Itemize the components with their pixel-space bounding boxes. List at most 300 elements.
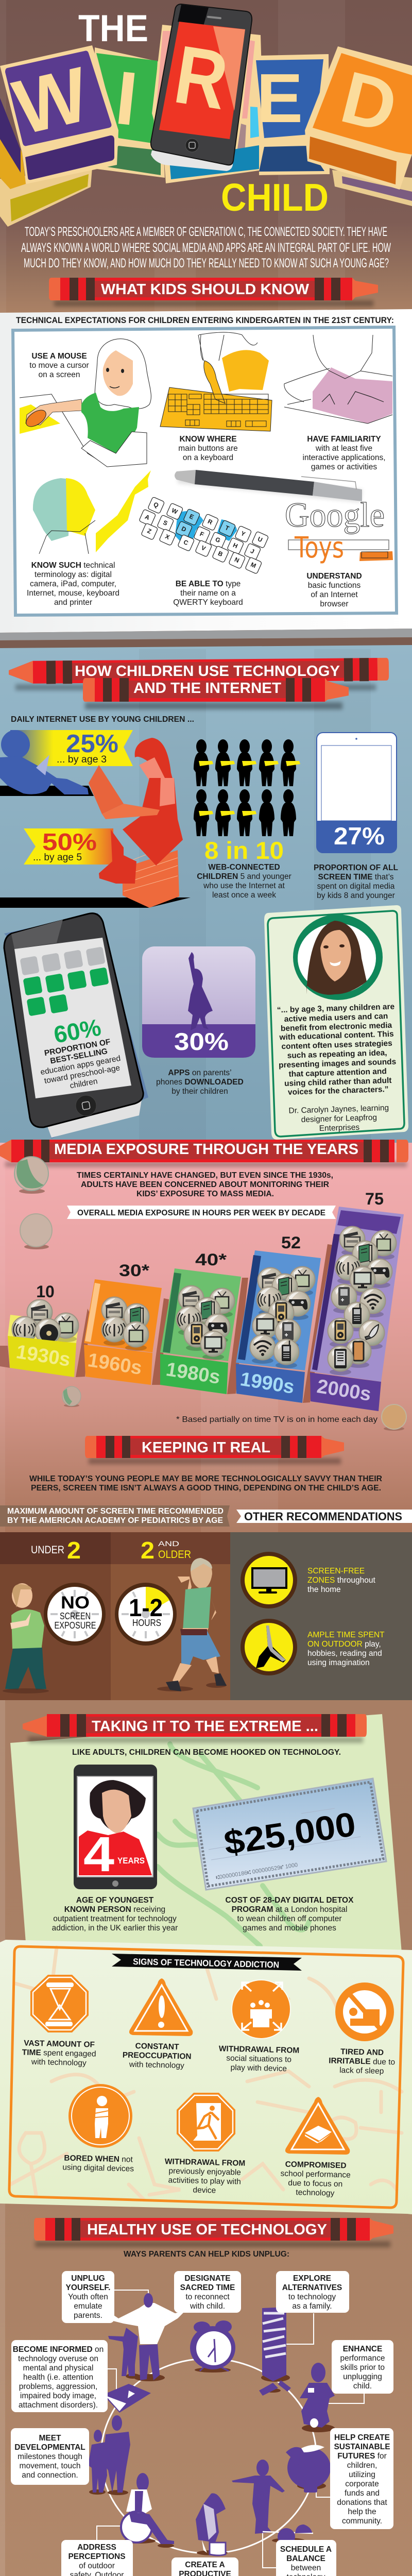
illustration: qwerty keys: X <box>164 533 171 541</box>
tip box: explore alternatives: ALTERNATIVES <box>282 2283 342 2292</box>
icon: screen-free <box>241 1552 297 1608</box>
phone: 60 percent: BEST-SELLING <box>49 1047 108 1065</box>
background: planks <box>139 649 371 1144</box>
crayon heading: how children use technology <box>9 658 389 690</box>
label: cost of detox: COST OF 28-DAY DIGITAL DETOX <box>226 1896 354 1905</box>
sign: bored person <box>68 2084 132 2148</box>
intro paragraph <box>21 225 391 270</box>
figure: adult and child reaching <box>108 2293 185 2381</box>
clock: no screen exposure: SCREEN <box>60 1611 91 1621</box>
sign label: withdrawal activities: device <box>193 2185 216 2195</box>
sign label: constant preoccupation: PREOCCUPATION <box>123 2050 192 2061</box>
sign label: bored when: using digital devices <box>62 2163 134 2174</box>
label: apps on parents phones: phones DOWNLOADED <box>156 1078 244 1087</box>
bar: 1960s 30 hours: 30* <box>119 1261 150 1280</box>
crayon heading: what kids should know <box>49 278 378 307</box>
label: know such: camera, iPad, computer, <box>30 580 116 588</box>
quote text: Enterprises <box>319 1123 360 1133</box>
background: lower wood section <box>0 1700 412 2576</box>
cycle diagram: ways to unplug <box>11 2271 393 2576</box>
pictogram: 8 in 10 children <box>194 739 300 836</box>
tip box: schedule a balance: between <box>291 2564 321 2572</box>
figure: adult and child standing <box>88 2415 130 2495</box>
panel: under 2 <box>0 1532 111 1700</box>
tip box: enhance <box>332 2340 393 2394</box>
label: know where: main buttons are <box>178 444 238 453</box>
bar: 1990s 52 hours <box>227 1233 321 1403</box>
quote text: active media users and can <box>284 1012 388 1024</box>
bar: 2000s 75 hours: 2000s <box>316 1376 372 1405</box>
tip box: meet developmental: DEVELOPMENTAL <box>14 2443 85 2452</box>
crayon heading: media exposure: MEDIA EXPOSURE THROUGH THE YEARS <box>54 1141 358 1158</box>
tip box: meet developmental: and connection. <box>22 2471 78 2480</box>
label: use a mouse: USE A MOUSE <box>31 352 87 361</box>
label: web-connected children: who use the Internet at <box>203 882 285 890</box>
tip box: become informed <box>11 2340 108 2412</box>
clock: no screen exposure: EXPOSURE <box>55 1620 96 1631</box>
tip box: meet developmental: MEET <box>39 2434 61 2443</box>
illustration: qwerty keys: V <box>200 544 207 552</box>
ring <box>101 2359 316 2553</box>
label: web-connected children: CHILDREN 5 and younger <box>197 872 291 881</box>
tip box: explore alternatives: to technology <box>288 2293 336 2301</box>
ribbon: 50 percent by age 5 <box>24 828 113 865</box>
tip box: designate sacred time: with child. <box>190 2302 225 2311</box>
block: W purple <box>0 45 118 184</box>
tip box: sustainable futures: HELP CREATE <box>334 2433 390 2442</box>
tip box: enhance: skills prior to <box>340 2363 385 2372</box>
illustration: qwerty keys: N <box>233 556 241 564</box>
tip box: become informed: health (i.e. attention <box>23 2373 93 2382</box>
quote text: benefit from electronic media <box>281 1021 392 1033</box>
ribbon: 50 percent by age 5: 50% <box>42 828 97 855</box>
sign label: compromised: due to focus on <box>288 2179 342 2189</box>
sign label: withdrawal social <box>218 2044 299 2074</box>
quote text: using child rather than adult <box>284 1076 392 1088</box>
tip box: address perceptions <box>61 2540 133 2576</box>
phone: 60 percent: children <box>69 1077 98 1090</box>
app tile: 30 percent: 30% <box>174 1028 229 1055</box>
figure: toddler <box>3 1583 49 1693</box>
background: hero wood <box>0 0 412 317</box>
marble: large grey <box>20 1214 52 1249</box>
heading: 2 and older: 2 <box>141 1537 154 1564</box>
label: proportion of screen time: spent on digital media <box>317 882 395 891</box>
sign label: vast amount: TIME spent engaged <box>22 2048 96 2059</box>
tip box: become informed: BECOME INFORMED on <box>13 2345 104 2354</box>
phone: 60 percent: toward preschool-age <box>44 1063 121 1086</box>
illustration: google toys browser: Toys <box>294 531 344 565</box>
crayon heading: taking it to the extreme <box>23 1714 367 1743</box>
tip box: address perceptions: PERCEPTIONS <box>68 2552 126 2561</box>
intro text: media <box>77 1171 333 1198</box>
sign: school book triangle <box>285 2097 350 2155</box>
sign: withdrawal circle <box>231 1979 291 2039</box>
label: screen-free zones: SCREEN-FREE <box>307 1567 365 1575</box>
icon: tablet 27 percent <box>317 733 397 853</box>
label: proportion of screen time: SCREEN TIME that’s <box>318 873 394 882</box>
illustration: google toys browser <box>285 495 393 565</box>
label: ample time outdoors: ON OUTDOOR play, <box>307 1640 381 1649</box>
label: have familiarity: with at least five <box>315 444 372 453</box>
hero: smartphone with R <box>151 4 252 171</box>
tip box: meet developmental: milestones though <box>18 2452 82 2461</box>
figure: baby <box>300 2363 335 2432</box>
label: know where: on a keyboard <box>183 453 233 462</box>
ribbon: max screen time <box>0 1505 230 1527</box>
label: have familiarity: interactive applications, <box>302 453 386 462</box>
label: use a mouse: on a screen <box>38 370 80 379</box>
bar: 1960s 30 hours <box>76 1261 162 1385</box>
quote text: such as repeating an idea, <box>287 1048 387 1060</box>
label: apps on parents phones: APPS on parents’ <box>168 1069 232 1077</box>
sign label: vast amount: VAST AMOUNT OF <box>24 2039 95 2049</box>
label: web-connected children: WEB-CONNECTED <box>208 863 280 872</box>
sign label: withdrawal activities: activities to play with <box>168 2176 241 2187</box>
label: proportion of screen time: by kids 8 and younger <box>317 891 395 900</box>
bar: 1980s 40 hours <box>152 1250 241 1394</box>
illustration: qwerty keys: S <box>162 519 169 527</box>
label: apps on parents phones: by their children <box>171 1087 228 1096</box>
quote text: presenting images and sounds <box>279 1058 397 1070</box>
tip box: designate sacred time: SACRED TIME <box>180 2283 235 2292</box>
hero: smartphone with R: R <box>169 28 234 127</box>
label: proportion of screen time: PROPORTION OF ALL <box>314 863 398 872</box>
paper: signs of technology addiction <box>0 1940 412 2214</box>
sign label: withdrawal activities: previously enjoyable <box>168 2166 241 2177</box>
crayon heading: and the internet <box>83 678 349 709</box>
crayon heading: media exposure <box>0 1140 408 1167</box>
shelf: top black <box>0 786 94 796</box>
intro text: media: TIMES CERTAINLY HAVE CHANGED, BUT EVEN SINCE THE 1930s, <box>77 1171 333 1180</box>
tip box: designate sacred time: DESIGNATE <box>184 2274 231 2283</box>
quote text: that capture attention and <box>288 1067 387 1079</box>
figure: balance scale <box>263 2524 313 2546</box>
sign label: tired and irritable: TIRED AND <box>340 2047 384 2057</box>
ribbon: signs of technology addiction: SIGNS OF TECHNOLOGY ADDICTION <box>133 1957 279 1970</box>
ribbon: 25 percent by age 3: ... by age 3 <box>57 754 107 765</box>
crayon heading: healthy use of technology: HEALTHY USE OF TECHNOLOGY <box>87 2222 327 2238</box>
block: back yellow <box>0 98 92 227</box>
illustration: girl with mouse <box>20 339 151 467</box>
tip box: productive role <box>171 2557 238 2576</box>
tip box: sustainable futures: utilizing <box>349 2470 375 2479</box>
marble: small green <box>62 1386 81 1407</box>
white panel <box>0 309 412 648</box>
sign label: constant preoccupation: with technology <box>129 2060 184 2070</box>
stat: 8 in 10: 8 in 10 <box>204 837 284 864</box>
label: know such: KNOW SUCH technical <box>31 561 115 570</box>
quote text: “... by age 3, many children are <box>277 1003 395 1014</box>
label: web-connected children: least once a week <box>212 891 276 900</box>
illustration: child on tablet <box>284 335 392 423</box>
tip box: become informed: technology overuse on <box>18 2354 98 2363</box>
label: have familiarity: HAVE FAMILIARITY <box>307 435 381 444</box>
crayon heading: healthy use of technology <box>34 2218 393 2247</box>
intro text: keeping it real <box>29 1475 382 1493</box>
tip box: enhance: ENHANCE <box>343 2345 382 2353</box>
label: ample time outdoors: using imagination <box>307 1658 370 1667</box>
illustration: qwerty keys: C <box>182 538 190 547</box>
label: understand: of an Internet <box>311 590 358 599</box>
sign label: withdrawal social: social situations to <box>226 2054 291 2064</box>
illustration: boy pointing <box>33 470 151 554</box>
background: blue wood section <box>0 644 412 1144</box>
tip box: sustainable futures: community. <box>342 2517 382 2526</box>
illustration: qwerty keys: Q <box>152 501 160 509</box>
label: daily internet use: DAILY INTERNET USE BY YOUNG CHILDREN ... <box>11 715 194 724</box>
heading: 2 and older <box>141 1537 191 1564</box>
sign label: tired and irritable: lack of sleep <box>339 2066 384 2076</box>
decoration: crayon drawings <box>10 1947 402 2200</box>
bar: 1980s 40 hours: 40* <box>195 1250 227 1269</box>
tip box: schedule a balance: SCHEDULE A <box>280 2545 332 2554</box>
illustration: qwerty keys: D <box>180 525 187 533</box>
background: pink wood section <box>0 1143 412 1532</box>
background: pale plank <box>0 1143 278 1532</box>
panel: other recommendations <box>230 1532 412 1700</box>
label: ways parents can help: WAYS PARENTS CAN HELP KIDS UNPLUG: <box>124 2250 289 2259</box>
marble: large green <box>14 1157 48 1194</box>
quote text: Dr. Carolyn Jaynes, learning <box>288 1104 389 1115</box>
tip box: designate sacred time <box>174 2271 241 2313</box>
block: R behind phone <box>152 25 264 183</box>
tablet: 4 years child: YEARS <box>117 1856 145 1866</box>
figure: girl balancing <box>232 2460 285 2534</box>
sign label: constant preoccupation: CONSTANT <box>135 2042 179 2052</box>
heading: under 2 <box>31 1537 81 1564</box>
tip box: address perceptions: of outdoor <box>79 2562 115 2570</box>
figure: blue boy with tablet <box>0 730 89 794</box>
sign label: withdrawal activities <box>164 2157 245 2196</box>
sign label: withdrawal social: WITHDRAWAL FROM <box>219 2044 299 2055</box>
tip box: sustainable futures: FUTURES for <box>337 2452 387 2461</box>
clock: no screen exposure: NO <box>61 1593 90 1613</box>
hero: wooden alphabet blocks <box>0 25 412 227</box>
title: THE: THE <box>78 8 148 49</box>
sign label: vast amount: with technology <box>31 2058 87 2067</box>
figure: boy dancing <box>157 1558 227 1691</box>
illustration: qwerty keys: M <box>250 561 257 569</box>
phone: 60 percent: 60% <box>52 1013 103 1048</box>
illustration: qwerty keys: F <box>199 530 205 538</box>
heading: 2 and older: AND <box>158 1539 179 1548</box>
heading: technical expectations: TECHNICAL EXPECTATIONS FOR CHILDREN ENTERING KINDERGARTEN IN THE 21ST CENTURY: <box>16 316 394 325</box>
label: ample time outdoors: hobbies, reading and <box>307 1649 382 1658</box>
label: know such: and printer <box>54 598 92 607</box>
block: E blue <box>256 54 330 175</box>
figure: piggy bank <box>286 2445 331 2493</box>
tablet: 4 years child: 4 <box>83 1827 114 1882</box>
tip box: unplug yourself: Youth often <box>68 2293 108 2301</box>
check: 25000 <box>193 1778 386 1890</box>
clock: 1-2 hours: HOURS <box>132 1618 161 1628</box>
tip box: sustainable futures: children, <box>347 2461 377 2470</box>
illustration: qwerty keys: B <box>217 550 224 558</box>
tip box: schedule a balance <box>276 2540 336 2576</box>
quote text: content often uses strategies <box>281 1039 392 1051</box>
tip box: become informed: problems, aggression, <box>19 2382 97 2391</box>
quote text: designer for Leapfrog <box>301 1113 377 1124</box>
tip box: sustainable futures: corporate <box>345 2480 379 2488</box>
label: ample time outdoors: AMPLE TIME SPENT <box>307 1631 385 1639</box>
sign label: bored when <box>62 2154 134 2174</box>
tip box: become informed: impaired body image, <box>20 2392 96 2400</box>
tip box: sustainable futures: SUSTAINABLE <box>334 2443 390 2451</box>
label: be able to: BE ABLE TO type <box>176 580 241 588</box>
figure: jenga tower <box>259 2307 291 2396</box>
tip box: unplug yourself: parents. <box>74 2311 102 2320</box>
intro text: hooked: LIKE ADULTS, CHILDREN CAN BECOME HOOKED ON TECHNOLOGY. <box>72 1748 341 1757</box>
ribbon: 50 percent by age 5: ... by age 5 <box>33 852 82 863</box>
tip box: sustainable futures <box>330 2428 393 2529</box>
intro text: media: ADULTS HAVE BEEN CONCERNED ABOUT MONITORING THEIR <box>81 1180 329 1189</box>
quote text <box>277 1003 399 1134</box>
label: be able to: QWERTY keyboard <box>173 598 243 607</box>
block: I green <box>93 47 165 178</box>
card: expert quote <box>264 905 408 1140</box>
tip box: enhance: child. <box>353 2382 372 2391</box>
figure: child with bucket <box>196 2493 228 2555</box>
decoration: green tendrils <box>158 1744 309 1946</box>
ribbon: 25 percent by age 3 <box>10 730 133 766</box>
tip box: meet developmental: movement, touch <box>20 2462 80 2470</box>
tip box: sustainable futures: help the <box>348 2507 376 2516</box>
bar: 1930s 10 hours <box>0 1282 79 1377</box>
tip box: unplug yourself <box>62 2271 114 2323</box>
label: understand: browser <box>320 600 349 608</box>
tip box: meet developmental <box>11 2428 89 2485</box>
crayon heading: how children use technology: HOW CHILDREN USE TECHNOLOGY <box>75 663 340 680</box>
block: I green: I <box>112 56 141 142</box>
illustration: qwerty keys: E <box>188 513 195 521</box>
tip box: become informed: attachment disorders). <box>19 2401 98 2410</box>
clock: no screen exposure <box>44 1583 106 1646</box>
crayon heading: taking it to the extreme: TAKING IT TO THE EXTREME ... <box>92 1718 318 1735</box>
illustration: qwerty keys: W <box>170 506 179 516</box>
illustration: stylus <box>175 470 363 502</box>
title: CHILD: CHILD <box>221 176 329 219</box>
quote text: voices for the characters.” <box>288 1085 389 1097</box>
quote text: with educational content. This <box>279 1030 394 1042</box>
sign label: constant preoccupation <box>122 2041 192 2071</box>
sign label: withdrawal activities: WITHDRAWAL FROM <box>165 2157 245 2168</box>
icon: tablet 27 percent: 27% <box>334 822 385 850</box>
ribbon: signs of technology addiction <box>112 1954 302 1971</box>
tip box: explore alternatives <box>276 2271 349 2313</box>
tip box: explore alternatives: as a family. <box>292 2302 332 2311</box>
sign label: bored when: BORED WHEN not <box>64 2154 133 2164</box>
illustration: qwerty keys: T <box>224 524 231 532</box>
label: age of youngest: AGE OF YOUNGEST <box>76 1896 154 1905</box>
illustration: qwerty keys: R <box>207 518 214 526</box>
phone: 60 percent: education apps geared <box>40 1054 121 1077</box>
label: be able to: their name on a <box>180 589 236 598</box>
illustration: qwerty keys: Y <box>239 530 247 538</box>
tip box: unplug yourself: YOURSELF. <box>66 2283 110 2292</box>
crayon heading: keeping it real: KEEPING IT REAL <box>142 1439 270 1456</box>
tip box: become informed: mental and physical <box>23 2364 94 2372</box>
sign label: compromised: COMPROMISED <box>285 2160 347 2170</box>
label: age of youngest: outpatient treatment for technology <box>53 1914 177 1923</box>
background: left edge strip <box>0 1700 5 2576</box>
illustration: hand on keyboard <box>160 332 272 431</box>
block: E blue: E <box>256 59 303 137</box>
crayon heading: keeping it real <box>85 1436 344 1464</box>
bar: 1960s 30 hours: 1960s <box>87 1349 143 1379</box>
heading: under 2: 2 <box>67 1537 81 1564</box>
figure: alarm clock <box>190 2320 235 2372</box>
sign label: compromised: technology <box>296 2188 335 2198</box>
label: know such: Internet, mouse, keyboard <box>27 589 119 598</box>
sign: warning triangle <box>129 1978 193 2036</box>
label: know such: terminology as: digital <box>35 570 112 579</box>
sign: no sleep <box>335 1982 394 2041</box>
label: cost of detox: games and mobile phones <box>243 1924 336 1933</box>
label: age of youngest: KNOWN PERSON receiving <box>64 1905 165 1914</box>
tip box: address perceptions: ADDRESS <box>77 2543 116 2552</box>
background: wood planks <box>0 0 345 317</box>
sign label: withdrawal social: play with device <box>230 2063 287 2073</box>
figure: person on ball <box>121 2473 174 2548</box>
label: screen-free zones: the home <box>307 1585 341 1594</box>
bar: 1930s 10 hours: 10 <box>36 1282 55 1301</box>
chart: media exposure by decade <box>0 1190 404 1411</box>
connector lines <box>97 2290 364 2568</box>
bar: 2000s 75 hours: 75 <box>365 1190 384 1208</box>
paper: taking it to the extreme <box>10 1714 402 1953</box>
tip box: sustainable futures: funds and <box>345 2489 380 2498</box>
label: use a mouse: to move a cursor <box>29 361 89 370</box>
illustration: qwerty keys: G <box>214 536 221 544</box>
panel: 2 and older <box>111 1532 230 1700</box>
intro text: keeping it real: WHILE TODAY’S YOUNG PEOPLE MAY BE MORE TECHNOLOGICALLY SAVVY THAN THEIR <box>29 1475 382 1483</box>
bar: 1930s 10 hours: 1930s <box>15 1341 72 1371</box>
tip box: enhance: performance <box>340 2354 385 2363</box>
crayon heading: what kids should know: WHAT KIDS SHOULD KNOW <box>101 281 310 298</box>
check: 25000: $25,000 <box>221 1805 358 1862</box>
footnote: * Based partially on time TV is on in home each day <box>176 1415 377 1424</box>
tablet: 4 years child <box>74 1765 157 1889</box>
label: understand: basic functions <box>308 581 361 590</box>
clock: 1-2 hours: 1-2 <box>129 1595 163 1622</box>
tip box: designate sacred time: to reconnect <box>185 2293 230 2301</box>
tip box: explore alternatives: EXPLORE <box>293 2274 331 2283</box>
label: have familiarity: games or activities <box>311 463 377 471</box>
label: cost of detox: to wean children off computer <box>237 1914 342 1923</box>
phone: 60 percent: PROPORTION OF <box>44 1038 111 1058</box>
frame border <box>13 327 397 615</box>
block: W purple: W <box>6 50 97 151</box>
check: 25000: ⑆000000186⑆ 000000529⑈ 1000 <box>216 1862 298 1881</box>
illustration: google toys browser: Google <box>285 495 385 534</box>
tip box: enhance: unplugging <box>343 2372 382 2381</box>
illustration: qwerty keys: H <box>232 541 239 550</box>
heading: under 2: UNDER <box>31 1544 64 1556</box>
shelf: bottom black <box>0 897 191 908</box>
tip box: unplug yourself: emulate <box>74 2302 102 2311</box>
phone: 60 percent <box>4 913 148 1139</box>
ribbon: overall media exposure <box>67 1206 336 1219</box>
ribbon: 25 percent by age 3: 25% <box>66 730 118 758</box>
ribbon: other recommendations: OTHER RECOMMENDATIONS <box>244 1510 402 1523</box>
sign label: compromised <box>280 2160 351 2198</box>
sign label: compromised: school performance <box>280 2169 351 2180</box>
sign: exit octagon <box>177 2093 235 2151</box>
figure: red girl with laptop on books <box>89 738 183 908</box>
tip box: sustainable futures: donations that <box>337 2498 387 2507</box>
marble: amber <box>382 1404 406 1431</box>
